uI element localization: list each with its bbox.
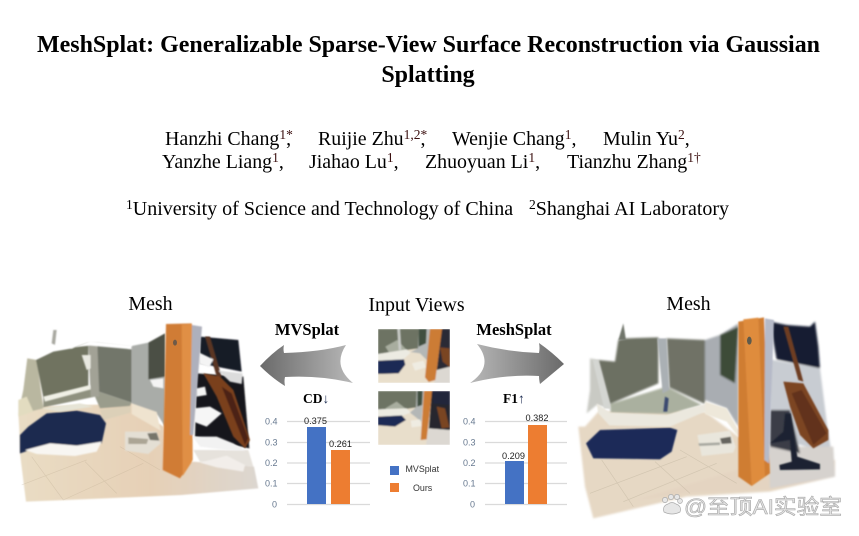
input view 1 xyxy=(378,329,450,383)
watermark: @至顶AI实验室 xyxy=(684,496,842,519)
chart: CD: 0.3 xyxy=(265,438,278,448)
heading: left mesh: Mesh xyxy=(128,293,173,315)
right arrow: to MeshSplat xyxy=(470,343,564,384)
chart: F1: 0.2 xyxy=(463,458,476,468)
authors: , xyxy=(685,128,690,150)
affiliations: 2 xyxy=(529,197,536,212)
left arrow: to MVSplat xyxy=(260,345,353,386)
authors: 2 xyxy=(678,127,685,142)
authors: , xyxy=(279,151,284,173)
chart: F1: 0.209 xyxy=(502,451,525,461)
authors: Tianzhu Zhang xyxy=(567,151,687,173)
chart: CD: 0.261 xyxy=(329,439,352,449)
authors: * xyxy=(420,127,428,142)
tile lines xyxy=(590,450,737,507)
input view 2 xyxy=(378,391,450,445)
chart: CD: 0.4 xyxy=(265,416,278,426)
affiliations xyxy=(126,197,729,220)
authors xyxy=(162,127,701,173)
affiliations: Shanghai AI Laboratory xyxy=(536,198,729,220)
tile lines xyxy=(22,447,160,500)
legend: MVSplat xyxy=(406,464,440,474)
legend: Ours xyxy=(413,483,433,493)
heading: right mesh: Mesh xyxy=(666,293,711,315)
left reconstruction: MVSplat mesh xyxy=(18,323,258,502)
authors: 1,2 xyxy=(404,127,421,142)
authors: Jiahao Lu xyxy=(309,151,387,173)
icon: paw xyxy=(662,494,682,514)
authors: Wenjie Chang xyxy=(452,128,565,150)
authors: Ruijie Zhu xyxy=(318,128,404,150)
label: MeshSplat: MeshSplat xyxy=(476,320,552,339)
bar: Ours CD xyxy=(331,450,350,504)
chart: CD xyxy=(265,391,370,510)
chart: F1: 0 xyxy=(470,500,475,510)
chart: F1: 0.4 xyxy=(463,416,476,426)
authors: Mulin Yu xyxy=(603,128,678,150)
authors: Zhuoyuan Li xyxy=(425,151,528,173)
right reconstruction: MeshSplat mesh xyxy=(578,317,835,518)
authors: 1 xyxy=(565,127,572,142)
authors: 1 xyxy=(528,150,535,165)
authors: Yanzhe Liang xyxy=(162,151,272,173)
legend xyxy=(390,464,440,493)
affiliations: 1 xyxy=(126,197,133,212)
chart title: CD: CD↓ xyxy=(303,391,329,406)
bar: MVSplat CD xyxy=(307,427,326,504)
label: MVSplat: MVSplat xyxy=(275,320,340,339)
title: MeshSplat: Generalizable Sparse-View Surface Reconstruction via Gaussian xyxy=(37,31,821,58)
authors: 1 xyxy=(279,127,286,142)
chart: F1: 0.3 xyxy=(463,438,476,448)
heading: input views: Input Views xyxy=(368,294,465,316)
chart title: F1: F1↑ xyxy=(503,391,525,406)
chart: CD: 0.375 xyxy=(304,416,327,426)
chart: F1: 0.382 xyxy=(526,413,548,423)
authors: , xyxy=(535,151,540,173)
authors: , xyxy=(394,151,399,173)
authors: Hanzhi Chang xyxy=(165,128,279,150)
title xyxy=(37,31,821,88)
authors: , xyxy=(286,128,291,150)
chart: CD: 0.2 xyxy=(265,458,278,468)
affiliations: University of Science and Technology of China xyxy=(133,198,513,220)
authors: * xyxy=(286,127,293,142)
authors: 1† xyxy=(687,150,701,165)
chart: CD: 0.1 xyxy=(265,478,278,488)
authors: 1 xyxy=(387,150,394,165)
authors: , xyxy=(421,128,426,150)
bar: Ours F1 xyxy=(528,425,547,504)
chart: CD: 0 xyxy=(272,500,277,510)
title: Splatting xyxy=(381,62,475,88)
chart: F1 xyxy=(463,391,567,510)
bar: MVSplat F1 xyxy=(505,461,524,504)
chart: F1: 0.1 xyxy=(463,478,476,488)
authors: 1 xyxy=(272,150,279,165)
authors: , xyxy=(572,128,576,150)
